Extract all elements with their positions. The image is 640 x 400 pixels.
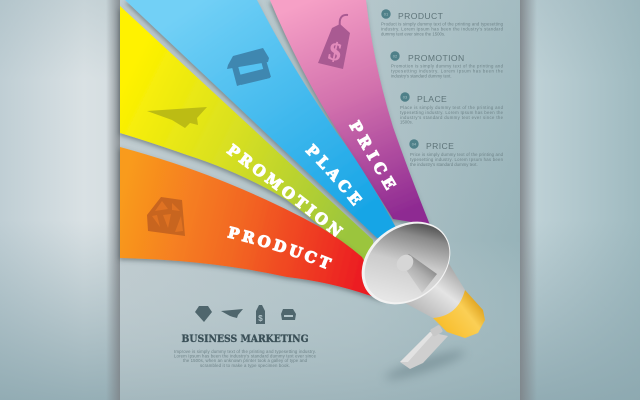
icon row (195, 305, 296, 324)
icon: megaphone (345, 205, 485, 384)
item: promotion: typesetting industry. Lorem Ipsum has been the (391, 68, 504, 74)
item: product: PRODUCT (398, 11, 444, 21)
item: promotion: industry's standard dummy text. (391, 74, 452, 78)
item: product: Product is simply dummy text of the printing and typesetting (381, 22, 504, 26)
item: place: typesetting industry. Lorem Ipsum has been the (400, 110, 504, 115)
icon: small plane (221, 309, 243, 318)
item: promotion: PROMOTION (408, 53, 465, 63)
icon: price tag: $ (326, 38, 344, 67)
panel: list of four Ps (381, 9, 504, 167)
icon: small stall (281, 309, 296, 320)
icon: small diamond (195, 306, 212, 322)
driver cylinder (393, 251, 437, 293)
ground shadow (383, 346, 467, 384)
item: place: 1500s. (400, 120, 413, 124)
label: product: PRODUCT (227, 226, 332, 270)
title: BUSINESS MARKETING (182, 334, 308, 345)
panel: business marketing footer (174, 305, 317, 368)
description: the 1500s, when an unknown printer took a galley of type and (183, 358, 308, 363)
handle (400, 325, 448, 369)
item: place (400, 92, 504, 124)
item: place: PLACE (417, 94, 447, 104)
item: place: Place is simply dummy text of the printing and (400, 105, 504, 110)
yellow grip (433, 290, 485, 338)
description: scrambled it to make a type specimen book. (200, 363, 290, 368)
item: price: 04 (412, 142, 417, 146)
item: place: 03 (403, 94, 408, 100)
horn cone (405, 262, 465, 318)
icon: diamond (147, 197, 185, 236)
ribbon: place (125, 0, 400, 238)
item: product: 01 (384, 12, 389, 16)
ribbon: promotion (120, 6, 375, 270)
item: promotion (390, 51, 504, 78)
item: price: Price is simply dummy text of the printing and (410, 152, 504, 157)
description: Lorem Ipsum has been the industry's standard dummy text ever since (174, 354, 317, 358)
horn rim (345, 205, 467, 321)
icon: paper plane (147, 107, 207, 128)
description: Improve is simply dummy text of the printing and typesetting industry. (174, 349, 316, 354)
label: promotion: PROMOTION (226, 142, 344, 238)
icon: price tag (318, 15, 350, 69)
item: product (381, 9, 504, 37)
description (174, 349, 317, 368)
item: place: industry's standard dummy text ever since the (400, 115, 504, 120)
icon: small tag: $ (258, 314, 263, 323)
ribbon: product (120, 147, 385, 300)
label: price: PRICE (348, 119, 397, 191)
icon: market stall (227, 48, 271, 86)
horn inside (349, 207, 465, 319)
item: product: industry. Lorem Ipsum has been the industry's standard (381, 26, 504, 32)
panel: colored ribbons (117, 0, 430, 304)
item: promotion: 02 (393, 54, 398, 58)
item: product: dummy text ever since the 1500s. (381, 32, 445, 36)
ribbon: price (270, 0, 430, 225)
item: price: the industry's standard dummy text. (410, 162, 478, 167)
label: place: PLACE (304, 143, 363, 206)
item: price: typesetting industry. Lorem Ipsum has been (410, 157, 504, 162)
item: price: PRICE (426, 141, 454, 151)
item: price (409, 139, 504, 167)
panel: poster sheet (120, 0, 520, 400)
item: promotion: Promotion is simply dummy text of the printing and (391, 64, 504, 68)
